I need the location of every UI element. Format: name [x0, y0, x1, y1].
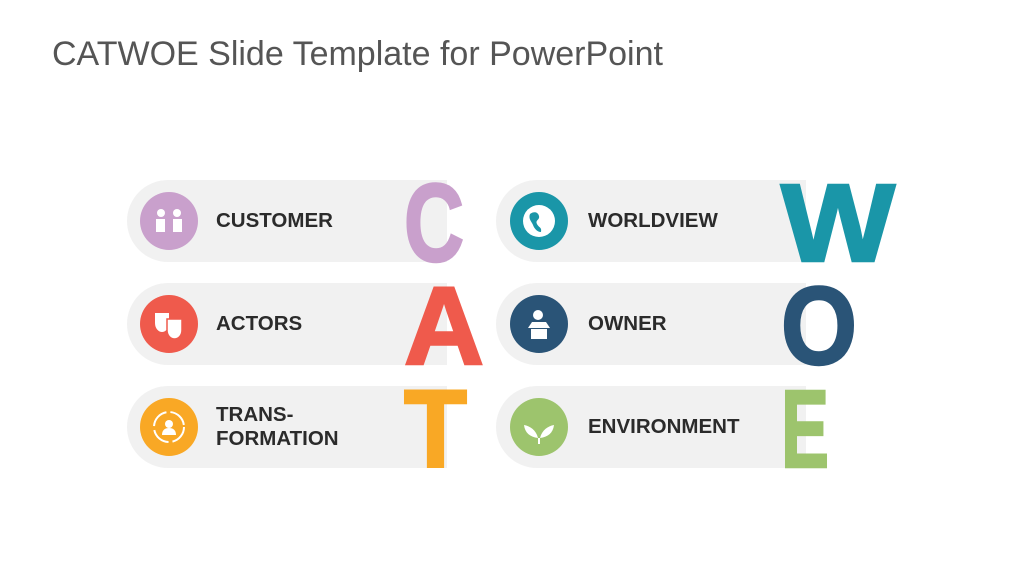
- letter C: C: [404, 162, 464, 285]
- panel: worldview: [496, 180, 806, 262]
- letter T: T: [404, 368, 467, 491]
- label: environment: ENVIRONMENT: [588, 415, 739, 438]
- panel: environment: [496, 386, 806, 468]
- label: transformation: FORMATION: [216, 427, 339, 450]
- label: owner: OWNER: [588, 312, 667, 335]
- label: transformation: [216, 403, 339, 450]
- label: customer: CUSTOMER: [216, 209, 333, 232]
- panel: customer: [127, 180, 447, 262]
- icon: globe: [510, 192, 568, 250]
- letter O: O: [781, 265, 857, 388]
- icon: leaves: [510, 398, 568, 456]
- icon: handshake: [140, 192, 198, 250]
- title: CATWOE Slide Template for PowerPoint: [52, 35, 663, 73]
- letter W: W: [781, 162, 895, 285]
- label: transformation: TRANS-: [216, 403, 293, 426]
- label: actors: ACTORS: [216, 312, 302, 335]
- letter A: A: [404, 265, 484, 388]
- panel: owner: [496, 283, 806, 365]
- icon: speaker: [510, 295, 568, 353]
- icon: masks: [140, 295, 198, 353]
- panel: transformation: [127, 386, 447, 468]
- letter E: E: [781, 368, 829, 491]
- label: worldview: WORLDVIEW: [588, 209, 718, 232]
- panel: actors: [127, 283, 447, 365]
- icon: cycle: [140, 398, 198, 456]
